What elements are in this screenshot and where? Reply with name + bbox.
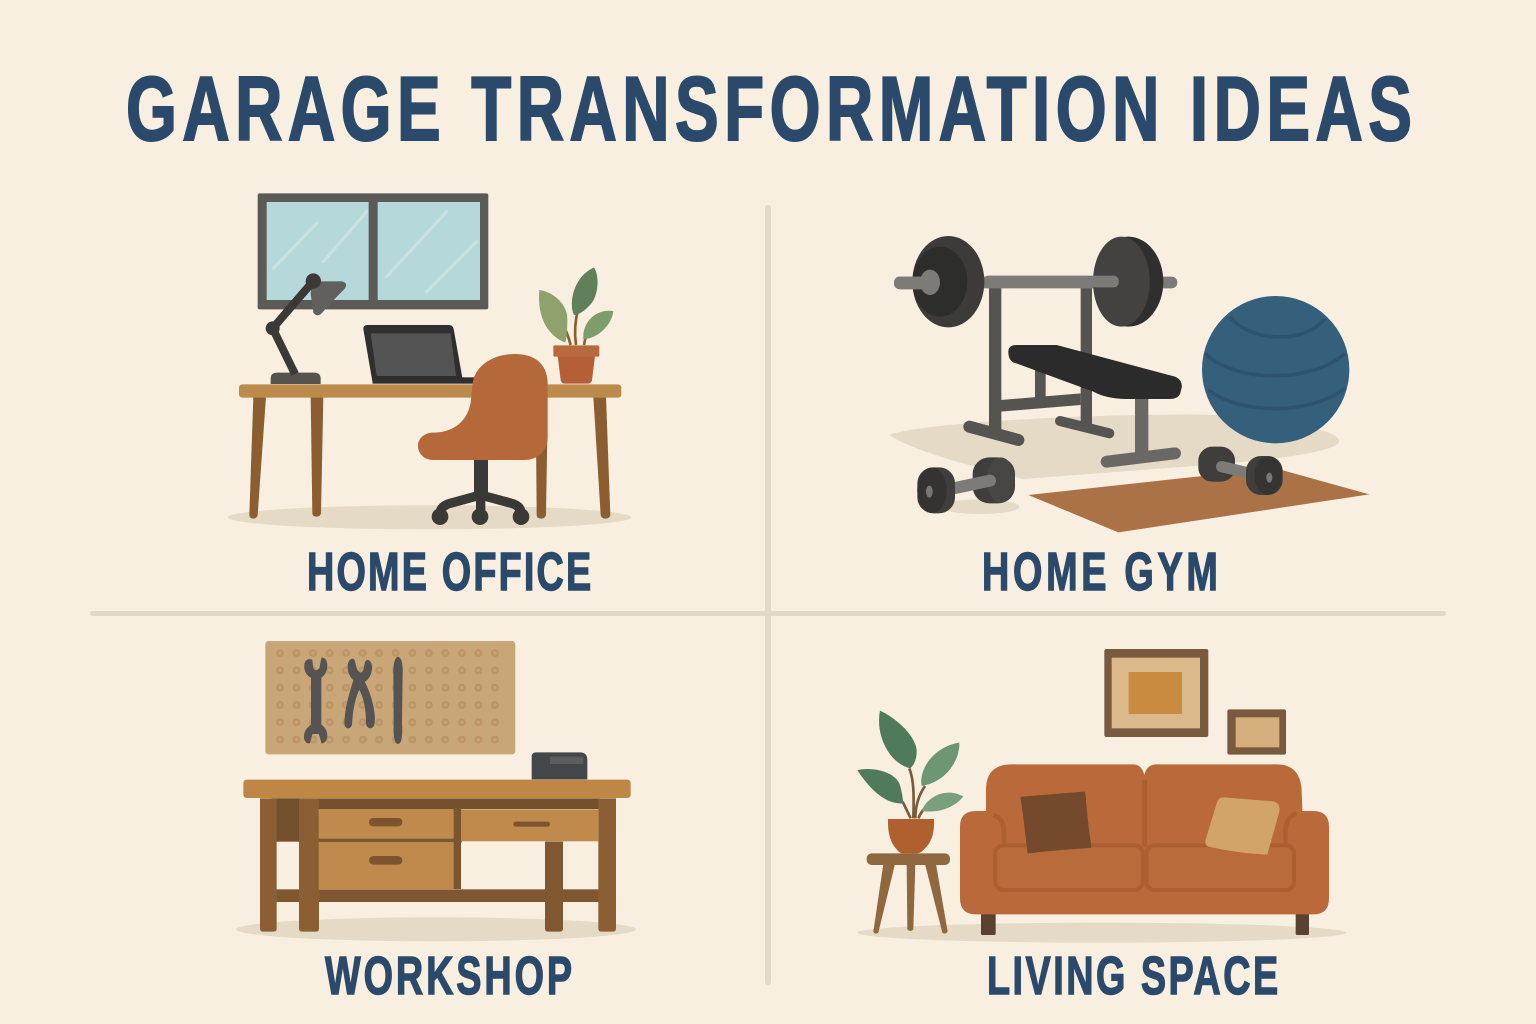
illustration: home office: [228, 193, 631, 529]
illustration: living space: [857, 649, 1346, 943]
barbell: [894, 236, 1177, 327]
squat rack: [969, 285, 1109, 440]
large picture frame: [1104, 649, 1208, 737]
illustration: workshop: [236, 641, 636, 941]
label: home office: HOME OFFICE: [307, 541, 591, 602]
desk: [239, 384, 621, 519]
exercise ball: [1202, 296, 1349, 443]
sofa: [960, 764, 1329, 935]
light pillow: [1205, 797, 1280, 855]
weight bench: [1008, 345, 1182, 462]
office chair: [418, 354, 548, 525]
dark pillow: [1022, 793, 1090, 852]
dumbbell right: [1198, 447, 1283, 495]
illustration: home gym: [889, 236, 1369, 532]
screwdriver: [393, 657, 403, 744]
potted plant: [539, 267, 613, 384]
window: [258, 193, 488, 309]
pliers: [345, 659, 374, 728]
workbench: [243, 780, 631, 932]
tool box: [532, 752, 587, 779]
side table: [867, 853, 950, 934]
wrench: [305, 658, 327, 743]
title: GARAGE TRANSFORMATION IDEAS: [126, 57, 1412, 160]
laptop: [363, 325, 476, 384]
panel: home gym: [889, 236, 1369, 602]
small picture frame: [1227, 709, 1286, 755]
panel: home office: [228, 193, 631, 602]
dumbbell left: [917, 457, 1019, 514]
panel: workshop: [236, 641, 636, 1006]
floor mat: [1028, 470, 1369, 532]
label: living space: LIVING SPACE: [987, 945, 1278, 1006]
panel: living space: [857, 649, 1346, 1006]
potted plant: [857, 711, 963, 853]
desk lamp: [266, 273, 346, 384]
label: home gym: HOME GYM: [982, 541, 1218, 602]
pegboard: [265, 641, 515, 754]
label: workshop: WORKSHOP: [325, 945, 572, 1006]
drawers: [319, 809, 599, 889]
